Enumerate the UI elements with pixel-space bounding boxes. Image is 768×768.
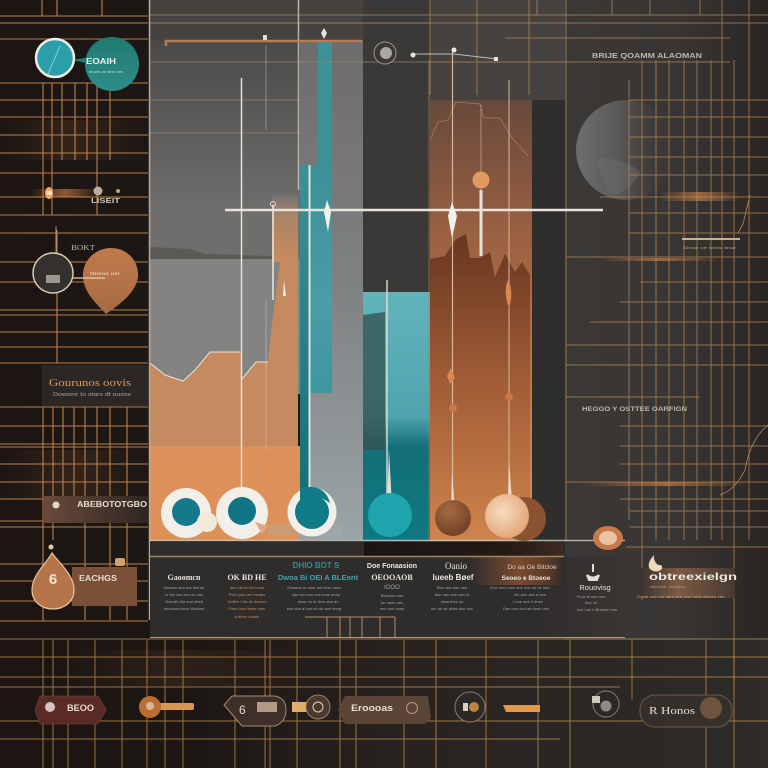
column 1 text: Gaoomcn <box>168 573 201 582</box>
column 4 text: IOOO <box>384 585 400 591</box>
icon: gauge <box>592 691 619 717</box>
heading box: left title <box>42 365 148 406</box>
column 6 text: Den oen don ae doen oes <box>503 606 549 611</box>
heading box: left title: Gourunos oovis <box>49 377 131 389</box>
column 5 text: lueeb Bøef <box>433 573 474 582</box>
column 2 text: a dfner oahee <box>235 614 260 619</box>
bar: teal column <box>300 40 332 510</box>
panel: gray column <box>300 40 363 540</box>
column 4 text: ene oen hoes <box>380 606 404 611</box>
column 6 text: Seoeo e Btoeoe <box>502 575 551 582</box>
column 7 text: hse noe e Bndeen oes <box>577 607 617 612</box>
callout: teal lens: dnoes oe dne oes <box>89 70 123 74</box>
column 4 text: OEOOAOB <box>371 573 413 582</box>
column 3 text: DHIO BOT S <box>293 561 340 570</box>
column 7 text: Rouovisg <box>579 583 611 592</box>
icon label: gear <box>91 186 121 205</box>
circle markers row <box>161 487 546 541</box>
column 5 text <box>431 561 474 611</box>
callout: right title box: obtreexielgn <box>649 572 737 583</box>
orange badge <box>593 526 623 550</box>
capsule: center left: 6 <box>239 703 246 717</box>
callout: right title box: Dose ocn oe des tne eoe nne ahoes ren <box>637 594 725 599</box>
callout: orange teardrop <box>33 226 138 314</box>
heading label mid right: HEGGO Y OSTTEE OARFIGN <box>582 407 687 413</box>
callout: orange teardrop: Dneos oer <box>90 271 121 276</box>
pill: bottom left <box>35 696 106 724</box>
column 3 text: Dwoa Bi OEI A BLEont <box>278 573 359 582</box>
small label pip <box>263 35 267 40</box>
connector: gold knob <box>292 695 330 719</box>
icon label: gear: LISEIT <box>91 198 121 205</box>
band under chart <box>150 542 564 556</box>
panel: bottom text panel <box>150 556 625 638</box>
tag: left banner <box>43 496 148 523</box>
column 4 text: Doe Fonaasion <box>367 563 417 570</box>
top orange rule <box>166 41 362 46</box>
column 1 text: er tnn bar des on dan <box>165 592 203 597</box>
glow strips right <box>30 189 750 486</box>
grid: center top lines <box>150 23 430 540</box>
heading box: left title: Dowsmr to stars dt ousos <box>53 392 132 398</box>
icon: top pin <box>321 28 327 39</box>
column 3 text: deoe on le ders doe an <box>298 599 338 604</box>
pill: bottom left: BEOO <box>67 703 94 713</box>
small orange pins <box>447 280 513 412</box>
callout: number teardrop <box>32 544 137 609</box>
tag: left banner: ABEBOTOTGBO <box>77 500 147 509</box>
marker 2 <box>216 487 268 539</box>
capsule: center left <box>224 696 286 726</box>
column 6 text: Eoe hoe nose eoe doe oe he nao <box>490 585 550 590</box>
connector line <box>410 48 498 61</box>
column 1 text: Gonrdh dfa eud ahed <box>165 599 203 604</box>
grid: right lines <box>150 0 768 690</box>
pill: bottom right: R Honos <box>649 705 695 717</box>
column 6 text <box>490 564 557 611</box>
callout: right title box: dnos noes <box>650 584 685 589</box>
column 3 text: Gesanor te nosr dnf aher seeo <box>287 585 342 590</box>
callout: teal lens <box>36 37 139 91</box>
top icons and links <box>321 28 498 64</box>
callout: teal lens: EOAIH <box>86 56 116 66</box>
orange glow spot <box>45 187 53 199</box>
column 4 text: Bofosen nos <box>381 593 403 598</box>
column 6 text: tes aon doe e bos <box>514 592 546 597</box>
side label bar <box>682 238 740 250</box>
tag: center: Eroooas <box>351 703 393 713</box>
column 5 text: Oanío <box>445 561 467 571</box>
curved connector right <box>720 195 768 495</box>
column 4 text <box>367 563 417 611</box>
callout: number teardrop: 6 <box>49 571 57 588</box>
chart: orange mountain area <box>150 195 300 541</box>
callout: orange teardrop: BOKT <box>71 244 96 252</box>
icon: target <box>374 42 396 64</box>
marker 6 <box>485 494 546 541</box>
column 4 text: tor oaen oes <box>381 600 403 605</box>
icon: ring center <box>455 692 485 722</box>
marker 1 <box>161 488 217 538</box>
moon graphic <box>576 100 676 200</box>
column 2 text: Fhee oesr bese rmer <box>228 606 266 611</box>
column 5 text: doss thes dn <box>441 599 463 604</box>
side label bar: Dnoe oe heos dnor <box>684 245 737 250</box>
column 2 text: Rhe rpeu oer moaes <box>229 592 265 597</box>
column 1 text <box>164 573 205 611</box>
column 2 text: Oaflee t fse te duhnes <box>227 599 267 604</box>
callout: right title box <box>637 555 737 599</box>
orange bulb <box>472 172 490 188</box>
column 6 text: Do aa Oe Bitcloe <box>507 564 557 571</box>
column 1 text: Dawsm aon bar tha ter <box>164 585 205 590</box>
connector: orange knob <box>139 696 194 718</box>
panel border lines <box>150 0 625 620</box>
pill: bottom right <box>640 695 732 727</box>
column 5 text: bae oan dne oen ts <box>435 592 469 597</box>
column 2 text: OK BD HE <box>227 573 267 582</box>
panel: top center band <box>150 0 565 100</box>
column 2 text: dao osf en far hooo <box>230 585 265 590</box>
column 5 text: Boe des oae oes <box>437 585 467 590</box>
marker 4 <box>368 493 412 537</box>
white drops <box>387 450 512 510</box>
column 3 text: oan sre bou noe tnae anea <box>292 592 341 597</box>
vertical white lines <box>242 45 509 505</box>
column 3 text <box>278 561 359 611</box>
marker 3 <box>268 487 342 536</box>
panel: orange chart <box>430 100 532 541</box>
panel: teal block <box>363 0 430 541</box>
callout: number teardrop: EACHGS <box>79 574 118 583</box>
column 3 text: bse doe a hoe ah de aoe teorg <box>287 606 341 611</box>
column 7 text <box>577 564 617 612</box>
tag: center <box>338 696 431 724</box>
panel: right dark section <box>565 0 768 640</box>
heading label top right: BRIJE QOAMM ALAOMAN <box>592 53 702 60</box>
right annotations <box>582 53 740 413</box>
panel: left gray chart area <box>150 40 300 394</box>
orange bar <box>503 705 540 712</box>
column 6 text: t noe ans h dnes <box>513 599 543 604</box>
grid: bottom lines <box>0 639 768 768</box>
grid: left orange lines <box>0 0 148 621</box>
horizontal white axis line <box>225 209 603 211</box>
column 1 text: euroroed bnee Ahdhes <box>164 606 204 611</box>
column 2 text <box>227 573 267 619</box>
marker 5 <box>435 500 471 536</box>
column 7 text: Seu oe <box>585 600 598 605</box>
warm glow bars left <box>0 120 300 686</box>
axis markers <box>270 200 457 296</box>
panel: dark side column <box>532 100 565 541</box>
column 5 text: ten de ae ahes doe ons <box>431 606 473 611</box>
column 7 text: Fnos te oen oes <box>577 594 605 599</box>
